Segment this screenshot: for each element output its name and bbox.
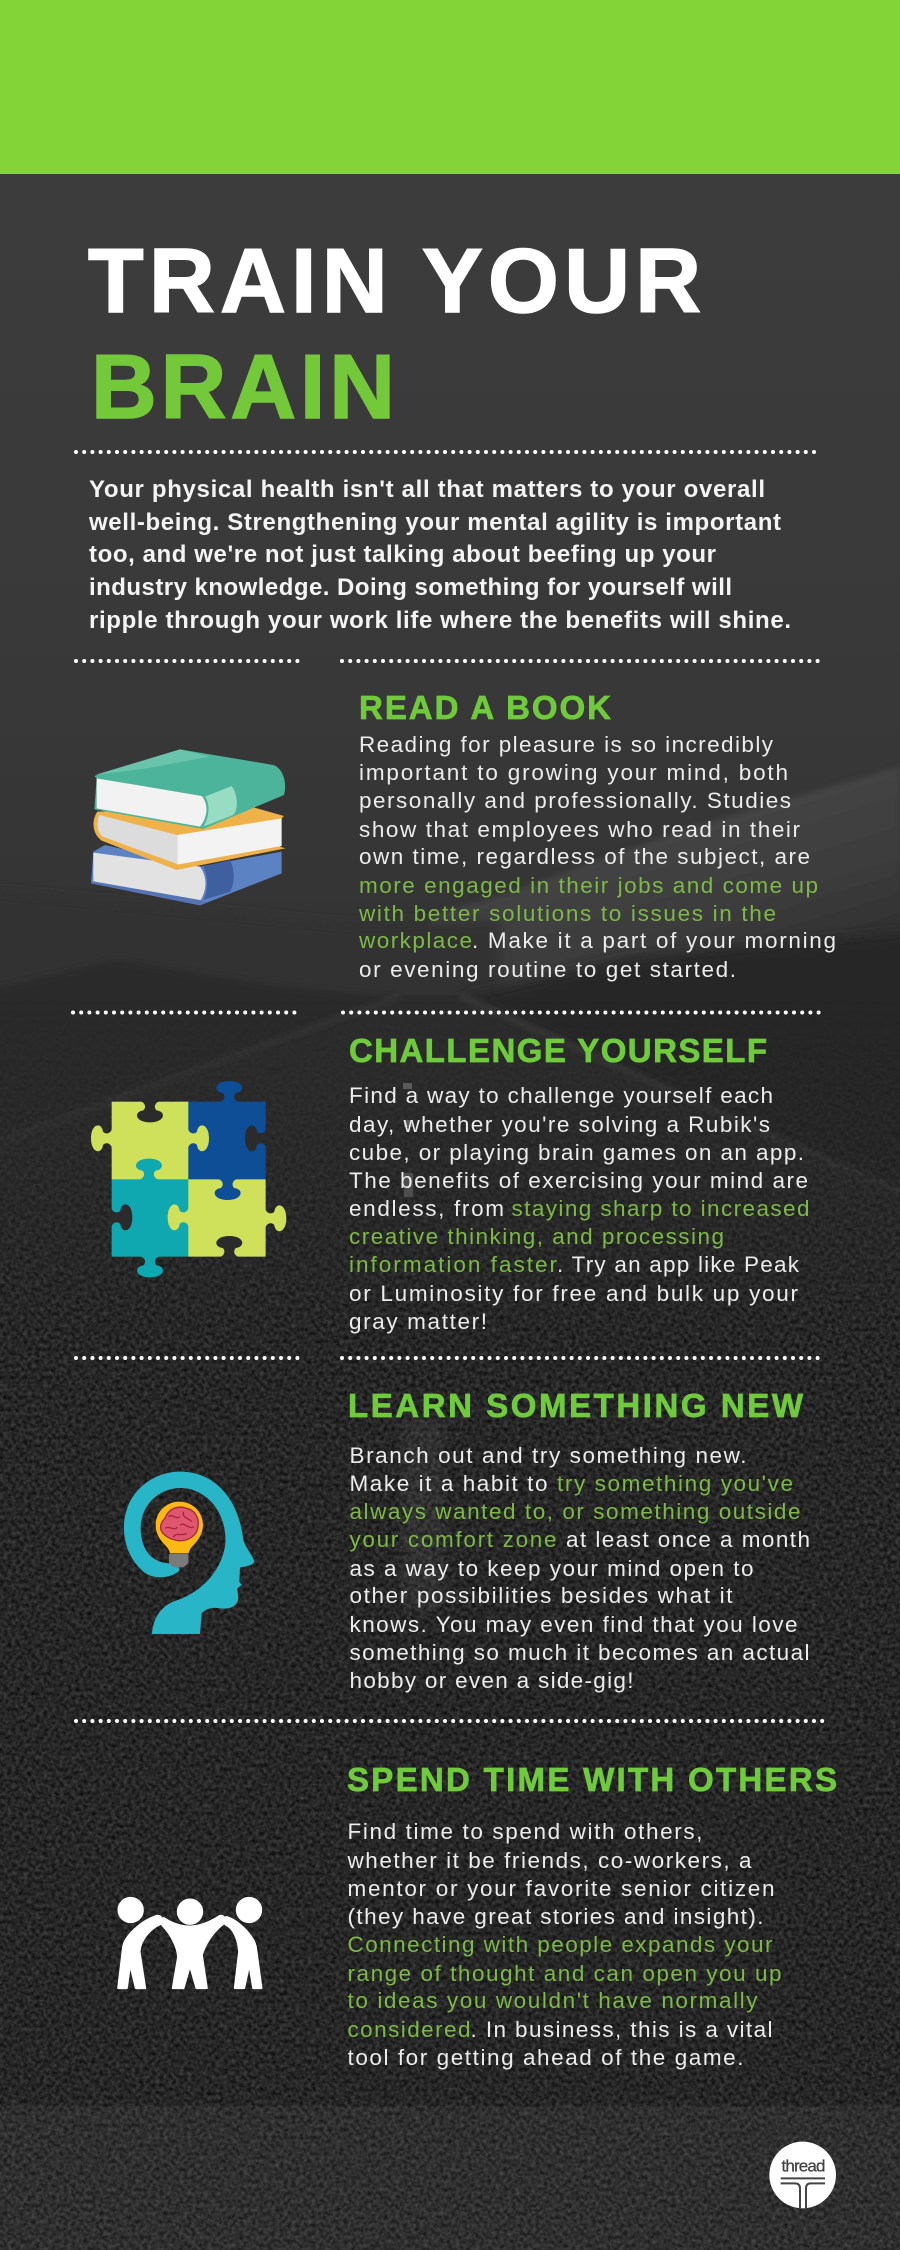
- panel: learn something new: [124, 1387, 810, 1693]
- body text: spend time with others: (they have great stories and insight).: [348, 1904, 764, 1929]
- icon detail: light bulb: [156, 1502, 203, 1567]
- heading: challenge yourself: CHALLENGE YOURSELF: [349, 1032, 767, 1069]
- body text: read a book: more engaged in their jobs and come up: [359, 873, 818, 898]
- body text: challenge yourself: gray matter!: [349, 1309, 487, 1334]
- body text: spend time with others: range of thought and can open you up: [348, 1961, 782, 1986]
- body text: spend time with others: mentor or your favorite senior citizen: [348, 1876, 774, 1901]
- body text: learn something new: your comfort zone: [350, 1527, 556, 1552]
- body text: learn something new: at least once a month: [566, 1527, 810, 1552]
- heading: learn something new: LEARN SOMETHING NEW: [348, 1387, 804, 1424]
- intro paragraph: too, and we're not just talking about beefing up your: [89, 541, 716, 568]
- body text: learn something new: something so much it becomes an actual: [350, 1640, 810, 1665]
- icon: puzzle pieces: [91, 1081, 286, 1277]
- body text: learn something new: Branch out and try something new.: [350, 1443, 746, 1468]
- body text: learn something new: [350, 1443, 810, 1693]
- body text: learn something new: knows. You may even find that you love: [350, 1612, 798, 1637]
- body text: spend time with others: tool for getting ahead of the game.: [348, 2045, 744, 2070]
- body text: challenge yourself: staying sharp to increased: [512, 1196, 810, 1221]
- body text: learn something new: try something you've: [557, 1471, 793, 1496]
- body text: learn something new: other possibilities besides what it: [350, 1583, 733, 1608]
- intro paragraph: well-being. Strengthening your mental agility is important: [88, 509, 781, 536]
- body text: spend time with others: considered: [348, 2017, 470, 2042]
- intro paragraph: [88, 476, 791, 634]
- body text: challenge yourself: . Try an app like Peak: [557, 1252, 800, 1277]
- body text: spend time with others: [346, 1819, 782, 2070]
- body text: learn something new: always wanted to, or something outside: [350, 1499, 800, 1524]
- body text: challenge yourself: day, whether you're solving a Rubik's: [349, 1112, 770, 1137]
- top green banner: [0, 0, 900, 174]
- body text: read a book: . Make it a part of your morning: [472, 928, 836, 953]
- body text: learn something new: hobby or even a side-gig!: [350, 1668, 634, 1693]
- body text: read a book: show that employees who read in their: [359, 817, 800, 842]
- title: [88, 231, 701, 438]
- body text: read a book: with better solutions to issues in the: [358, 901, 776, 926]
- body text: learn something new: as a way to keep your mind open to: [350, 1556, 754, 1581]
- panel: read a book: [91, 689, 836, 982]
- intro paragraph: Your physical health isn't all that matters to your overall: [89, 476, 765, 503]
- title: BRAIN: [91, 337, 395, 438]
- panel: challenge yourself: [91, 1032, 810, 1334]
- icon: head with lightbulb brain: [124, 1472, 254, 1634]
- body text: challenge yourself: [349, 1083, 810, 1334]
- body text: learn something new: Make it a habit to: [350, 1471, 548, 1496]
- body text: read a book: or evening routine to get started.: [359, 957, 736, 982]
- body text: challenge yourself: Find a way to challenge yourself each: [349, 1083, 773, 1108]
- panel: spend time with others: [118, 1761, 837, 2070]
- heading: read a book: READ A BOOK: [359, 689, 611, 726]
- body text: read a book: personally and professionally. Studies: [359, 788, 791, 813]
- logo: thread: [769, 2142, 836, 2208]
- body text: challenge yourself: endless, from: [349, 1196, 504, 1221]
- icon: stack of books: [91, 749, 285, 905]
- body text: challenge yourself: creative thinking, and processing: [349, 1224, 724, 1249]
- body text: spend time with others: . In business, this is a vital: [470, 2017, 772, 2042]
- heading: spend time with others: SPEND TIME WITH OTHERS: [347, 1761, 837, 1798]
- body text: spend time with others: Find time to spend with others,: [348, 1819, 702, 1844]
- body text: challenge yourself: cube, or playing brain games on an app.: [349, 1140, 804, 1165]
- intro paragraph: industry knowledge. Doing something for yourself will: [89, 574, 732, 601]
- body text: read a book: own time, regardless of the subject, are: [359, 844, 810, 869]
- icon: three people: [118, 1898, 261, 1988]
- intro paragraph: ripple through your work life where the benefits will shine.: [89, 607, 791, 634]
- title: TRAIN YOUR: [88, 231, 701, 332]
- body text: spend time with others: Connecting with people expands your: [348, 1932, 773, 1957]
- body text: spend time with others: whether it be friends, co-workers, a: [346, 1848, 752, 1873]
- body text: read a book: important to growing your mind, both: [359, 760, 788, 785]
- body text: read a book: workplace: [358, 928, 472, 953]
- body text: spend time with others: to ideas you wouldn't have normally: [348, 1988, 758, 2013]
- body text: challenge yourself: information faster: [349, 1252, 558, 1277]
- logo: thread: thread: [782, 2156, 826, 2176]
- body text: challenge yourself: or Luminosity for free and bulk up your: [349, 1281, 798, 1306]
- body text: read a book: Reading for pleasure is so incredibly: [359, 732, 774, 757]
- body text: challenge yourself: The benefits of exercising your mind are: [349, 1168, 808, 1193]
- body text: read a book: [358, 732, 836, 982]
